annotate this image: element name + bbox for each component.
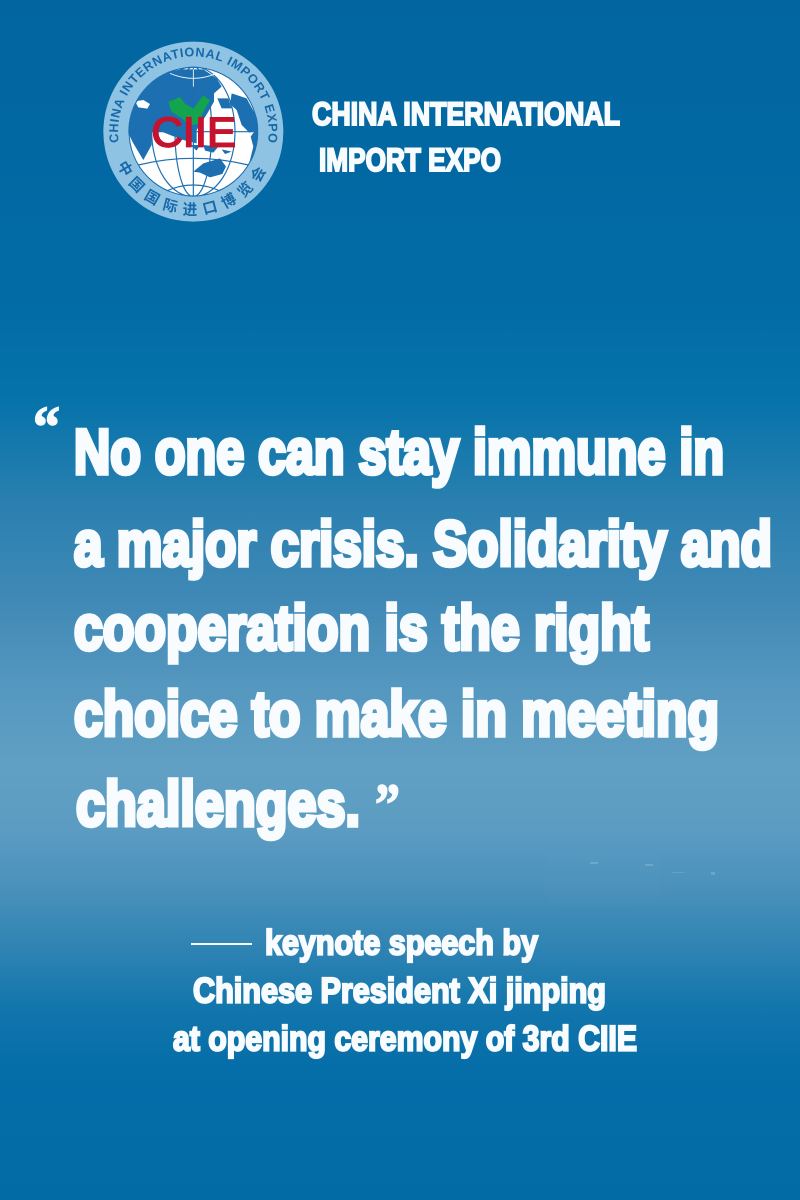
closing quote mark: ”	[375, 772, 400, 837]
header line 1: CHINA INTERNATIONAL	[312, 96, 620, 132]
logo outer ring	[103, 42, 283, 222]
quote line 5: challenges.	[76, 770, 360, 840]
main quote	[74, 418, 772, 840]
globe grid lines	[128, 67, 258, 197]
logo CIIE red letters: CIIE	[151, 110, 236, 156]
logo green China map	[168, 95, 210, 125]
logo ring English text: CHINA INTERNATIONAL IMPORT EXPO	[109, 48, 278, 142]
logo globe	[126, 67, 261, 197]
opening quote mark: “	[33, 394, 60, 459]
attribution line 3: at opening ceremony of 3rd CIIE	[173, 1020, 637, 1058]
logo ring Chinese text: 中国国际进口博览会	[119, 161, 266, 216]
attribution line 2: Chinese President Xi jinping	[193, 972, 606, 1010]
globe land masses	[126, 69, 261, 177]
faint cloud	[545, 850, 715, 905]
quote line 3: cooperation is the right	[74, 594, 649, 664]
attribution dash	[191, 943, 252, 945]
attribution text	[173, 924, 637, 1058]
logo: CIIE emblem	[103, 42, 284, 222]
header line 2: IMPORT EXPO	[319, 142, 501, 178]
globe upper white grid lines	[170, 69, 217, 87]
globe white Mediterranean	[135, 100, 150, 109]
header title	[312, 96, 620, 178]
attribution line 1: keynote speech by	[265, 924, 538, 962]
